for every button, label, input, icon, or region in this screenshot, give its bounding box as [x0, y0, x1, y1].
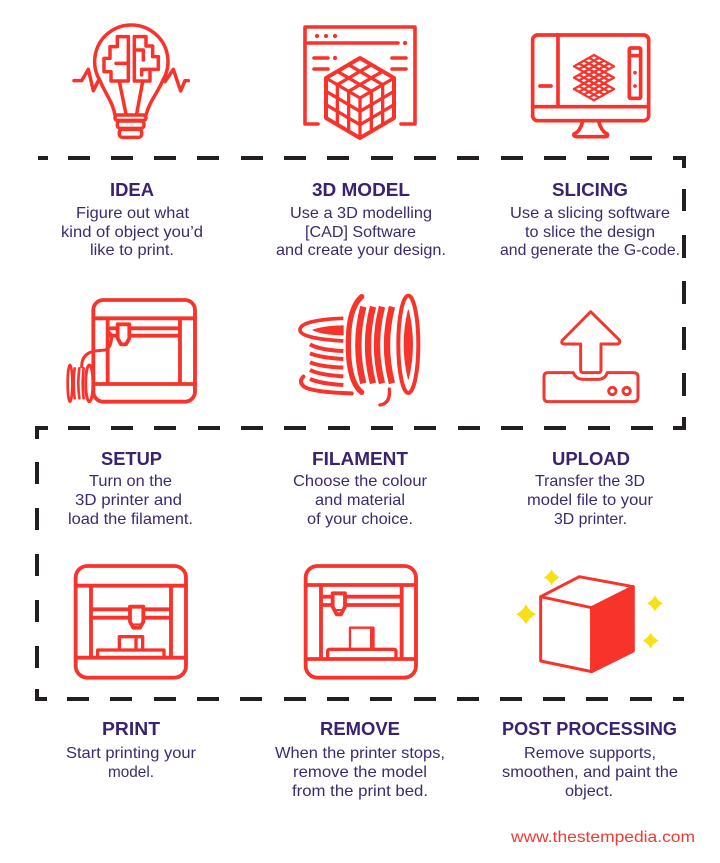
panel: idea: [61, 25, 203, 259]
website url: www.thestempedia.com: [510, 829, 695, 846]
heading: setup: SETUP: [101, 448, 162, 469]
text: idea description: [61, 205, 203, 259]
heading: print: PRINT: [102, 718, 161, 739]
text: slicing description: to slice the design: [525, 224, 655, 241]
heading: slicing: SLICING: [552, 179, 628, 200]
text: filament description: of your choice.: [307, 511, 413, 528]
icon: filament spool: [300, 296, 418, 405]
text: upload description: 3D printer.: [554, 511, 627, 528]
panel: 3d model: [276, 27, 446, 259]
text: post processing description: object.: [565, 783, 613, 800]
heading: upload: UPLOAD: [552, 448, 630, 469]
icon: monitor with sliced model: [533, 35, 649, 137]
text: idea description: Figure out what: [76, 205, 190, 222]
heading: idea: IDEA: [110, 179, 154, 200]
text: filament description: and material: [315, 492, 405, 509]
text: print description: model.: [108, 764, 154, 781]
text: post processing description: smoothen, and paint the: [502, 764, 678, 781]
panel: post processing: [502, 569, 678, 800]
panel: print: [66, 566, 197, 781]
text: idea description: kind of object you’d: [61, 224, 203, 241]
text: setup description: Turn on the: [89, 473, 172, 490]
text: upload description: model file to your: [527, 492, 654, 509]
icon: finished cube with sparkles: [516, 569, 663, 672]
icon: upload arrow: [544, 312, 638, 402]
heading: post processing: POST PROCESSING: [502, 718, 677, 739]
text: remove description: from the print bed.: [292, 783, 428, 800]
text: slicing description: [500, 205, 680, 259]
icon: printer printing object: [76, 566, 186, 678]
panel: filament: [293, 296, 428, 528]
panel: upload: [527, 312, 654, 528]
text: post processing description: [502, 745, 678, 800]
icon: light bulb with brain: [74, 25, 188, 137]
text: remove description: [275, 745, 445, 800]
text: filament description: Choose the colour: [293, 473, 428, 490]
text: print description: [66, 745, 197, 781]
icon: CAD window with cube: [305, 27, 415, 138]
text: print description: Start printing your: [66, 745, 197, 762]
text: 3d model description: and create your design.: [276, 242, 446, 259]
icon: printer with finished object: [306, 566, 416, 678]
text: remove description: When the printer stops,: [275, 745, 445, 762]
heading: remove: REMOVE: [320, 718, 400, 739]
text: filament description: [293, 473, 428, 528]
text: setup description: load the filament.: [68, 511, 193, 528]
heading: filament: FILAMENT: [312, 448, 409, 469]
dashed process path: [37, 158, 684, 699]
text: upload description: Transfer the 3D: [535, 473, 645, 490]
text: setup description: [68, 473, 193, 528]
panel: remove: [275, 566, 445, 800]
text: remove description: remove the model: [293, 764, 427, 781]
text: idea description: like to print.: [90, 242, 174, 259]
icon: printer with filament spool: [68, 300, 195, 402]
text: upload description: [527, 473, 654, 528]
text: setup description: 3D printer and: [75, 492, 182, 509]
text: 3d model description: [276, 205, 446, 259]
text: slicing description: and generate the G-code.: [500, 242, 680, 259]
heading: 3d model: 3D MODEL: [312, 179, 410, 200]
text: 3d model description: [CAD] Software: [305, 224, 416, 241]
text: slicing description: Use a slicing software: [510, 205, 670, 222]
text: 3d model description: Use a 3D modelling: [290, 205, 432, 222]
panel: slicing: [500, 35, 680, 259]
text: post processing description: Remove supports,: [524, 745, 656, 762]
panel: setup: [68, 300, 195, 528]
